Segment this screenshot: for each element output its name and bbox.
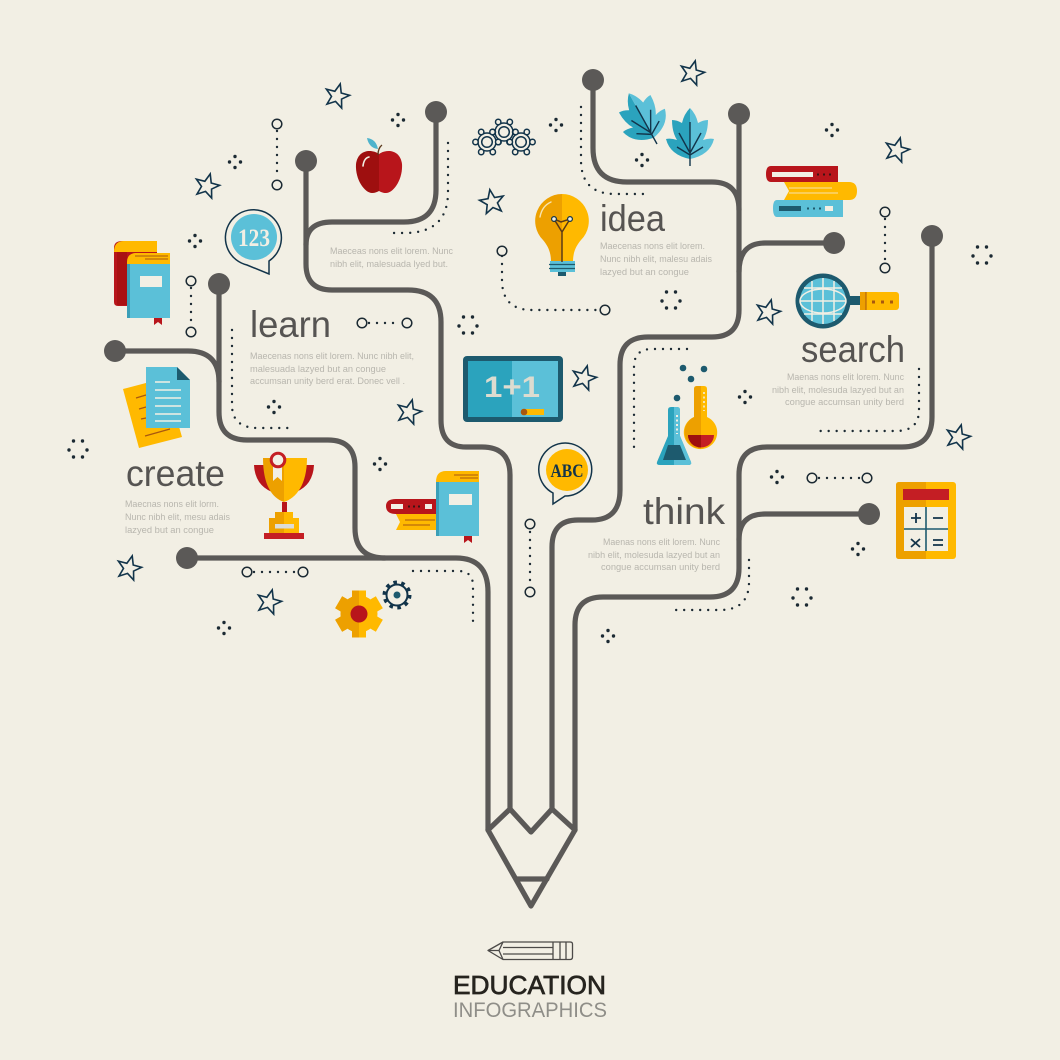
icon: 123 speech bubble: 123 xyxy=(238,225,270,252)
icon: light bulb xyxy=(535,194,589,276)
title: INFOGRAPHICS xyxy=(453,999,607,1022)
heading: create: create xyxy=(126,453,225,494)
title xyxy=(453,972,607,1022)
icon: books with flat book xyxy=(386,471,479,543)
icon: small pencil xyxy=(488,942,572,960)
icon: trophy xyxy=(254,453,314,539)
text block: search body: Maenas nons elit lorem. Nunc xyxy=(787,372,904,383)
dotted curved guides xyxy=(232,107,919,622)
icon: leaves xyxy=(608,82,714,166)
heading: search: search xyxy=(801,329,905,370)
icon: calculator xyxy=(896,482,956,559)
icon: 123 speech bubble xyxy=(225,210,281,274)
icon: documents xyxy=(123,367,190,448)
text block: create body: lazyed but an congue xyxy=(125,525,214,536)
text block: learn body xyxy=(250,351,414,387)
text block: learn body: malesuada lazyed but an congue xyxy=(250,364,386,375)
icon: book stack with red, yellow and blue books xyxy=(766,166,857,217)
text block: think body xyxy=(588,537,720,573)
icon: laboratory flasks xyxy=(657,365,717,465)
text block: create body: Nunc nibh elit, mesu adais xyxy=(125,512,230,523)
icon: outline gears xyxy=(473,119,535,155)
pencil tree: branching road lines xyxy=(115,80,932,830)
text block: create body xyxy=(125,499,230,536)
text block: search body xyxy=(772,372,904,408)
road end nodes xyxy=(104,69,943,569)
decorative stars xyxy=(115,58,973,615)
text block: idea body: Nunc nibh elit, malesu adais xyxy=(600,254,712,265)
text block: search body: congue accumsan unity berd xyxy=(785,397,904,408)
icon: chalkboard 1+1: 1+1 xyxy=(484,371,540,404)
text block: apple branch body: nibh elit, malesuada lyed but. xyxy=(330,259,448,270)
icon: gears xyxy=(335,582,410,638)
icon: apple xyxy=(356,138,402,193)
heading: learn: learn xyxy=(250,304,331,345)
text block: learn body: accumsan unity berd erat. Donec vell . xyxy=(250,376,405,387)
decorative dot clusters xyxy=(67,113,993,643)
heading: idea: idea xyxy=(600,198,665,239)
text block: think body: Maenas nons elit lorem. Nunc xyxy=(603,537,720,548)
text block: think body: nibh elit, molesuda lazyed but an xyxy=(588,550,720,561)
icon: chalkboard 1+1 xyxy=(463,356,563,422)
text block: idea body xyxy=(600,241,712,278)
icon: ABC speech bubble: ABC xyxy=(550,461,584,482)
text block: create body: Maecnas nons elit lorm. xyxy=(125,499,219,510)
icon: stacked books xyxy=(114,241,170,325)
icon: ABC speech bubble xyxy=(539,443,592,504)
text block: think body: congue accumsan unity berd xyxy=(601,562,720,573)
text block: apple branch body: Maeceas nons elit lorem. Nunc xyxy=(330,246,453,257)
pencil tip xyxy=(488,809,575,906)
heading: think: think xyxy=(643,491,726,532)
icon: magnifying glass with globe xyxy=(796,274,899,328)
title: EDUCATION xyxy=(453,972,606,1000)
text block: idea body: lazyed but an congue xyxy=(600,267,689,278)
text block: apple branch body xyxy=(330,246,453,270)
dotted connectors with small rings xyxy=(186,119,890,597)
text block: search body: nibh elit, molesuda lazyed but an xyxy=(772,385,904,396)
text block: idea body: Maecenas nons elit lorem. xyxy=(600,241,705,252)
text block: learn body: Maecenas nons elit lorem. Nunc nibh elit, xyxy=(250,351,414,362)
